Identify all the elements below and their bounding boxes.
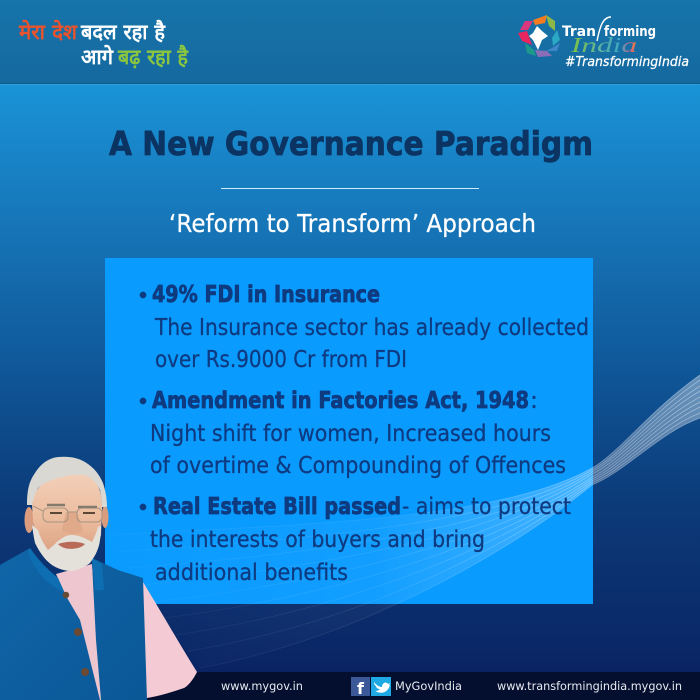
icon: petal ring with India map [518, 15, 560, 57]
logo: Transforming India: forming [604, 24, 656, 40]
logo wordmark: Tran [562, 24, 596, 40]
shirt front [56, 564, 102, 700]
jacket left [0, 548, 100, 700]
item: Factories Act amendment: of overtime & Compounding of Offences [150, 451, 566, 479]
mouth [58, 542, 85, 549]
slogan in Hindi: बदल रहा है [80, 19, 166, 44]
item: Real Estate Bill: the interests of buyers and bring [150, 525, 485, 553]
subtitle: ‘Reform to Transform’ Approach [169, 209, 536, 238]
item: FDI in insurance [140, 280, 589, 373]
logo: Transforming India [518, 15, 689, 70]
item: Factories Act amendment: Night shift for women, Increased hours [150, 419, 551, 447]
beard [32, 525, 101, 571]
ears [24, 507, 34, 533]
item: Real Estate Bill [140, 492, 571, 586]
panel: reforms box [105, 258, 593, 604]
portrait figure [0, 457, 197, 700]
item: Factories Act amendment: : [530, 386, 538, 414]
shirt sleeve [130, 582, 197, 700]
logo: Transforming India: #TransformingIndia [565, 55, 689, 70]
buttons [63, 592, 69, 598]
item: Real Estate Bill: - aims to protect [402, 492, 571, 520]
item: FDI in insurance: 49% FDI in Insurance [152, 280, 380, 308]
item: FDI in insurance: over Rs.9000 Cr from FDI [155, 345, 407, 373]
icon: facebook [351, 677, 370, 698]
hair [27, 457, 107, 507]
jacket collar [28, 548, 104, 592]
slogan in Hindi [18, 19, 189, 69]
footer bar [0, 672, 700, 700]
jacket right [92, 558, 147, 700]
footer label: MyGovIndia: MyGovIndia [395, 679, 462, 693]
eyebrows [47, 505, 97, 507]
divider [221, 188, 479, 189]
eyes [50, 512, 95, 514]
item: Real Estate Bill: Real Estate Bill passed [153, 492, 401, 520]
slogan in Hindi: बढ़ रहा है [117, 44, 189, 69]
item: FDI in insurance: The Insurance sector has already collected [154, 313, 589, 341]
slogan in Hindi: आगे [81, 44, 114, 69]
item: Real Estate Bill: additional benefits [155, 558, 348, 586]
decorative wave [105, 375, 700, 668]
icon: twitter [371, 677, 391, 696]
title: A New Governance Paradigm [109, 124, 593, 163]
face [32, 472, 102, 567]
reform list text [140, 280, 589, 586]
logo: Transforming India: India [570, 33, 637, 57]
slogan in Hindi: मेरा देश [18, 19, 78, 44]
icon: facebook: f [357, 679, 365, 698]
nose [62, 512, 83, 534]
glasses [33, 506, 102, 522]
item: Factories Act amendment [140, 386, 566, 479]
header band [0, 0, 700, 85]
footer link: mygov: www.mygov.in [221, 679, 303, 693]
footer link: transformingindia: www.transformingindia.mygov.in [497, 679, 682, 693]
item: Factories Act amendment: Amendment in Factories Act, 1948 [152, 386, 529, 414]
